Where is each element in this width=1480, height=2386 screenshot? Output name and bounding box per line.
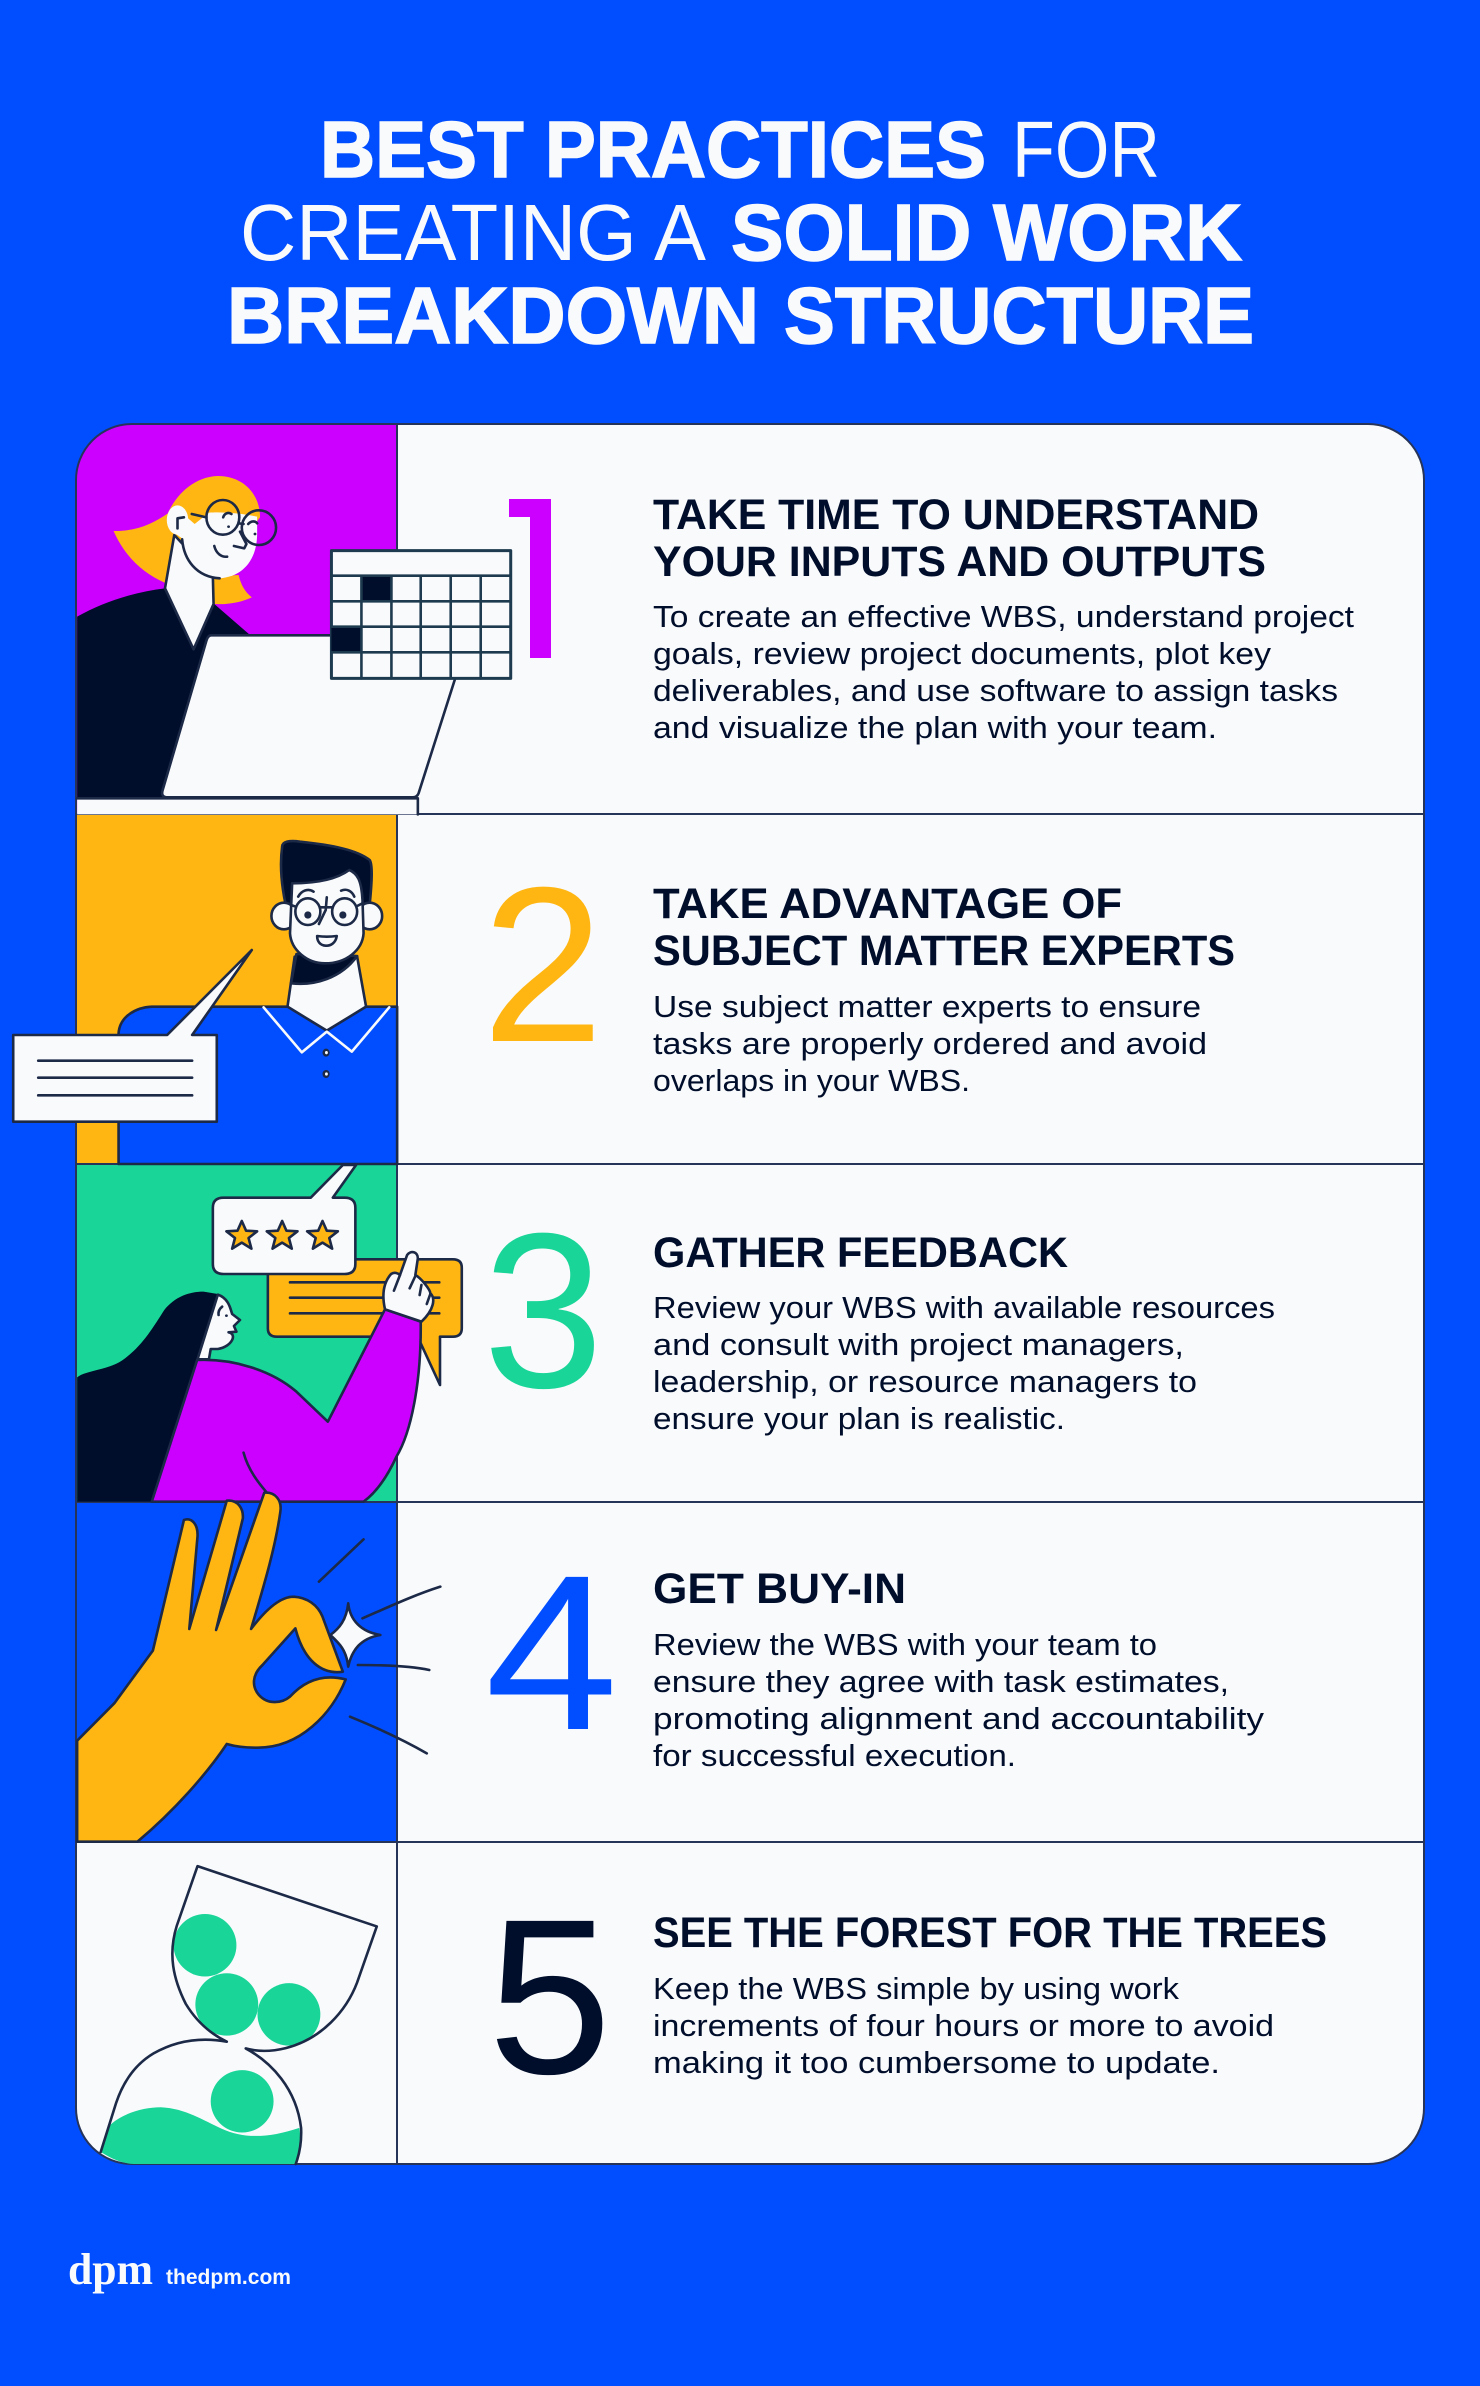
head [271,870,382,963]
purple sweater [152,1309,421,1502]
illustration panel colour blocks [77,425,396,1841]
title: CREATING A [240,188,707,277]
hair [114,476,260,604]
text 5: making it too cumbersome to update. [653,2045,1220,2080]
title: STRUCTURE [784,271,1254,360]
illustration: woman at laptop with calendar [77,476,511,814]
illustration: hourglass [101,1866,377,2164]
title: SOLID WORK [731,188,1242,277]
text 5: Keep the WBS simple by using work [653,1971,1180,2006]
sand [101,2107,300,2164]
star bubble [213,1165,356,1274]
illustration: man with speech bubble [13,841,397,1164]
face [197,1295,240,1359]
footer logo [68,2245,291,2294]
calendar [331,551,511,678]
illustration: OK hand gesture with sparkle [77,1493,440,1842]
hand [77,1493,346,1842]
text 3: leadership, or resource managers to [653,1364,1197,1399]
step 3 [483,1188,1275,1436]
title: FOR [1012,105,1160,194]
heading 1: TAKE TIME TO UNDERSTAND [653,491,1259,539]
sparkle rays [319,1539,440,1753]
number 2: 2 [482,841,604,1088]
speech bubble [13,950,252,1122]
illustration: woman rating with stars [77,1165,462,1502]
title: BEST PRACTICES [320,105,986,194]
text 3: ensure your plan is realistic. [653,1401,1065,1436]
glass outline [101,1866,377,2164]
heading 4: GET BUY-IN [653,1565,906,1613]
step 4 [485,1528,1265,1776]
heading 2: SUBJECT MATTER EXPERTS [653,927,1235,975]
text 3: Review your WBS with available resources [653,1290,1275,1325]
footer logo: thedpm.com [166,2266,291,2289]
title: BREAKDOWN [227,271,759,360]
laptop [77,635,469,814]
number 3: 3 [483,1188,603,1434]
neck [287,957,366,1031]
text 1: To create an effective WBS, understand project [653,599,1354,634]
text 2 [653,989,1207,1098]
heading 2 [653,880,1235,975]
text 5: increments of four hours or more to avoid [653,2008,1274,2043]
text 3: and consult with project managers, [653,1327,1184,1362]
text 3 [653,1290,1275,1436]
heading 3: GATHER FEEDBACK [653,1229,1068,1277]
text 4: Review the WBS with your team to [653,1627,1157,1662]
buttons [322,1049,330,1078]
title [227,105,1254,360]
neck and shirt [165,535,214,649]
shirt [119,1007,397,1164]
text 4: ensure they agree with task estimates, [653,1664,1229,1699]
number 1: 1 [472,453,599,707]
number 4: 4 [485,1528,618,1776]
text 2: overlaps in your WBS. [653,1063,970,1098]
text 2: Use subject matter experts to ensure [653,989,1201,1024]
step 5 [488,1873,1327,2120]
footer logo: dpm [68,2245,153,2294]
text 2: tasks are properly ordered and avoid [653,1026,1207,1061]
step 1 [509,499,1354,744]
balls [174,1914,320,2132]
text 4: for successful execution. [653,1738,1016,1773]
number 5: 5 [488,1873,612,2120]
heading 2: TAKE ADVANTAGE OF [653,880,1122,928]
text 1 [653,599,1354,745]
sparkle [330,1603,380,1667]
jacket [77,588,250,798]
pointing hand [383,1252,433,1322]
text 1: goals, review project documents, plot key [653,636,1272,671]
long hair [77,1292,218,1502]
text 4 [653,1627,1265,1773]
face [167,500,276,578]
hair [281,841,372,905]
heading 1 [653,491,1266,586]
text 5 [653,1971,1274,2080]
number 1 [509,499,551,658]
text 4: promoting alignment and accountability [653,1701,1265,1736]
beard shadow [291,954,357,984]
heading 5: SEE THE FOREST FOR THE TREES [653,1909,1327,1957]
heading 1: YOUR INPUTS AND OUTPUTS [653,538,1266,586]
collar [264,1007,389,1052]
text 1: and visualize the plan with your team. [653,710,1217,745]
text 1: deliverables, and use software to assign tasks [653,673,1338,708]
step 2 [482,841,1235,1098]
text bubble [268,1259,462,1385]
card background [76,424,1424,2164]
